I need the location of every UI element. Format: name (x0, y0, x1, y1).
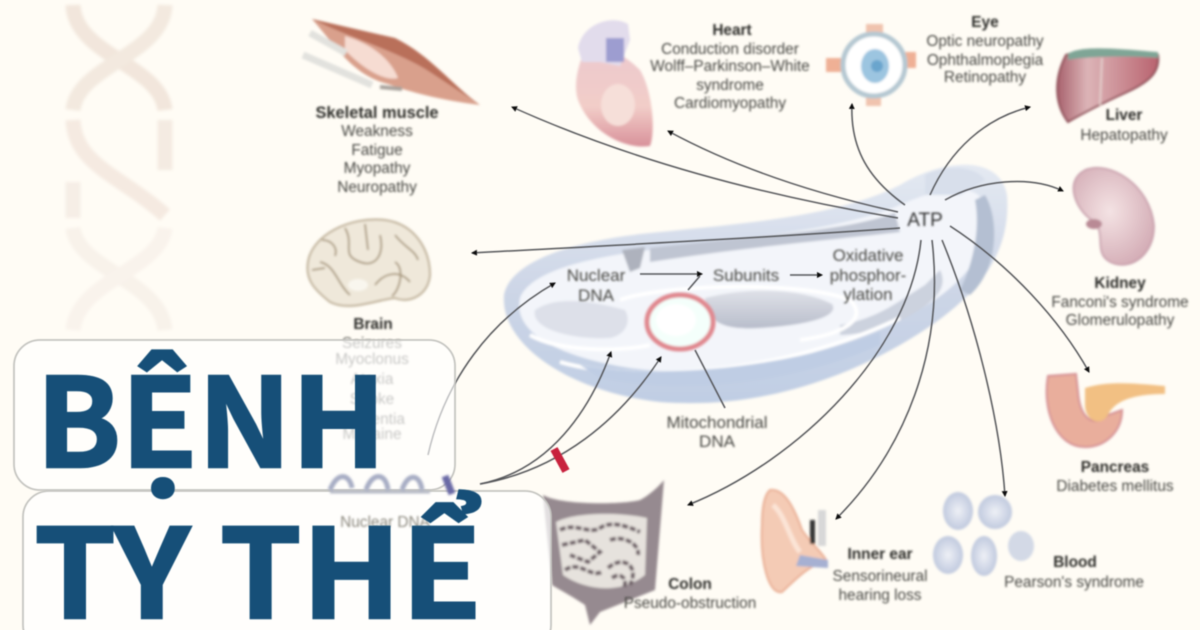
label: colon: Colon (668, 576, 712, 593)
label: colon: Pseudo-obstruction (624, 595, 756, 612)
illustration: skeletal muscle (303, 19, 480, 105)
label: skeletal muscle: Weakness (341, 123, 413, 140)
label: pancreas: Diabetes mellitus (1056, 478, 1174, 495)
faded labels beneath the panel: brain symptoms: Myoclonus (335, 351, 409, 368)
label: skeletal muscle: Fatigue (351, 142, 403, 159)
illustration: colon (543, 480, 664, 625)
label: colon (624, 576, 756, 612)
icon: nuclear DNA strand (330, 476, 452, 494)
label: heart (650, 22, 810, 112)
label: kidney (1051, 275, 1189, 329)
label: kidney: Fanconi's syndrome (1051, 294, 1189, 311)
label: mitochondrial DNA: Mitochondrial (666, 413, 768, 432)
faded labels beneath the panel: brain symptoms: Seizures (342, 335, 402, 352)
label: pancreas: Pancreas (1081, 459, 1149, 476)
illustration: pancreas (1047, 374, 1165, 447)
label: brain: Brain (353, 316, 393, 333)
label: nuclear DNA under panel: Nuclear DNA (340, 514, 431, 531)
illustration: inner ear (762, 490, 828, 592)
label: liver: Liver (1106, 107, 1142, 124)
label: blood: Pearson's syndrome (1004, 574, 1144, 591)
illustration: brain (307, 219, 430, 306)
label: kidney: Kidney (1094, 275, 1146, 292)
illustration: heart (576, 20, 653, 147)
label: eye: Optic neuropathy (926, 33, 1044, 50)
label: heart: Wolff–Parkinson–White (650, 58, 810, 75)
illustration: mitochondrion (504, 165, 1007, 403)
faded labels beneath the panel: brain symptoms: Migraine (342, 426, 402, 443)
label: liver: Hepatopathy (1080, 127, 1168, 144)
label: nuclear DNA, subunits, oxidative phosphorylation: Nuclear (567, 266, 626, 285)
label: heart: Cardiomyopathy (674, 95, 786, 112)
label: blood: Blood (1053, 554, 1097, 571)
label: heart: syndrome (696, 77, 764, 94)
label: heart: Heart (712, 22, 752, 39)
illustration: blood cells (933, 492, 1034, 576)
label: inner ear (833, 546, 927, 604)
label: nuclear DNA, subunits, oxidative phosphorylation: phosphor- (830, 266, 906, 285)
label: nuclear DNA, subunits, oxidative phosphorylation: Oxidative (833, 246, 903, 265)
panel: title box 1 (14, 340, 455, 490)
label: nuclear DNA, subunits, oxidative phosphorylation: ylation (843, 285, 893, 304)
panel: title box 2 (23, 491, 551, 630)
illustration: kidney (1073, 168, 1154, 265)
label: nuclear DNA, subunits, oxidative phosphorylation: DNA (578, 286, 615, 305)
label: mitochondrial DNA (666, 413, 768, 451)
label: nuclear DNA, subunits, oxidative phosphorylation: Subunits (713, 266, 779, 285)
faded labels beneath the panel: brain symptoms: Ataxia (351, 371, 394, 388)
label: nuclear DNA, subunits, oxidative phosphorylation (567, 246, 906, 305)
icon: mitochondrial DNA ring (647, 295, 713, 349)
label: mitochondrial DNA: DNA (699, 432, 736, 451)
label: eye: Ophthalmoplegia (927, 52, 1044, 69)
label: skeletal muscle: Neuropathy (337, 179, 417, 196)
faded labels beneath the panel: brain symptoms: Stroke (350, 391, 394, 408)
label: inner ear: Sensorineural (833, 568, 927, 585)
label: ATP: ATP (907, 210, 943, 231)
title: BỆNH: BỆNH (36, 325, 386, 503)
label: inner ear: hearing loss (838, 587, 922, 604)
label: liver (1080, 107, 1168, 144)
illustration: eye (826, 24, 916, 106)
label: pancreas (1056, 459, 1174, 495)
label: skeletal muscle (315, 104, 439, 196)
faded labels beneath the panel: brain symptoms (335, 335, 409, 443)
label: heart: Conduction disorder (661, 41, 799, 58)
label: eye: Retinopathy (944, 69, 1026, 86)
label: inner ear: Inner ear (847, 546, 913, 563)
label: blood (1004, 554, 1144, 591)
illustration: liver (1057, 48, 1158, 122)
label: skeletal muscle: Skeletal muscle (315, 104, 439, 122)
label: skeletal muscle: Myopathy (344, 160, 411, 177)
icon: mutation mark (554, 449, 566, 471)
label: kidney: Glomerulopathy (1066, 312, 1175, 329)
arrows (428, 104, 1089, 519)
icon: DNA helix watermark (73, 5, 165, 330)
label: eye (926, 14, 1044, 86)
label: eye: Eye (971, 14, 999, 31)
faded labels beneath the panel: brain symptoms: Dementia (339, 411, 405, 428)
